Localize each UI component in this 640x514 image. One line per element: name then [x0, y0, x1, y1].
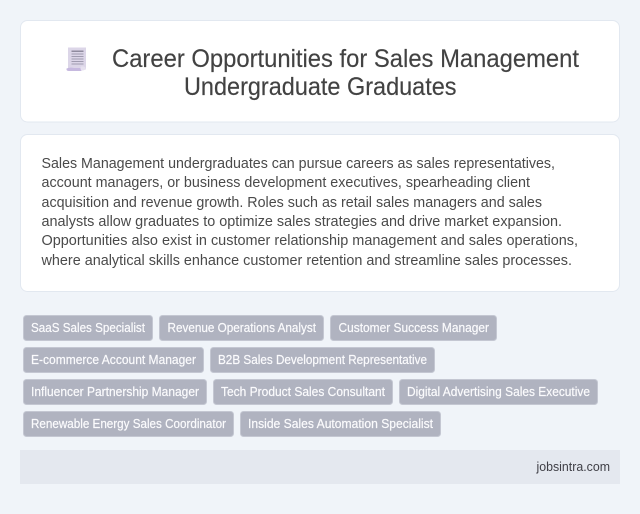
- tag: E-commerce Account Manager: E-commerce Account Manager: [31, 353, 196, 367]
- text block: description: [41, 156, 578, 269]
- tag: Revenue Operations Analyst: Revenue Operations Analyst: [168, 321, 316, 335]
- text block: description: where analytical skills enhance customer retention and streamline sales processes.: [41, 253, 572, 269]
- job tags: [24, 316, 598, 436]
- tag: Inside Sales Automation Specialist: Inside Sales Automation Specialist: [248, 417, 433, 431]
- panel: header: [20, 20, 620, 122]
- tag: Inside Sales Automation Specialist: [240, 412, 440, 436]
- tag: Renewable Energy Sales Coordinator: [24, 412, 234, 436]
- icon: paper scroll: [66, 48, 86, 71]
- tag: Digital Advertising Sales Executive: Digital Advertising Sales Executive: [407, 385, 590, 399]
- footer: [20, 450, 620, 484]
- tag: E-commerce Account Manager: [24, 348, 204, 372]
- tag: Revenue Operations Analyst: [160, 316, 324, 340]
- text block: description: Opportunities also exist in customer relationship management and sales operations,: [42, 233, 578, 249]
- tag: Digital Advertising Sales Executive: [400, 380, 598, 404]
- tag: B2B Sales Development Representative: B2B Sales Development Representative: [218, 353, 427, 367]
- text block: description: Sales Management undergraduates can pursue careers as sales representatives,: [42, 156, 555, 172]
- tag: SaaS Sales Specialist: SaaS Sales Specialist: [31, 321, 145, 335]
- tag: Renewable Energy Sales Coordinator: Renewable Energy Sales Coordinator: [31, 417, 226, 431]
- tag: Customer Success Manager: Customer Success Manager: [338, 321, 489, 335]
- tag: Influencer Partnership Manager: [24, 380, 206, 404]
- tag: Influencer Partnership Manager: Influencer Partnership Manager: [31, 385, 199, 399]
- title: Career Opportunities for Sales Management: [112, 45, 579, 73]
- footer source text: jobsintra.com: [536, 460, 610, 474]
- tag: Customer Success Manager: [330, 316, 496, 340]
- text block: description: acquisition and revenue growth. Roles such as retail sales managers and sales: [42, 195, 542, 211]
- tag: Tech Product Sales Consultant: [214, 380, 392, 404]
- text block: description: account managers, or business development executives, spearheading client: [42, 175, 530, 191]
- tag: SaaS Sales Specialist: [24, 316, 152, 340]
- text block: description: analysts allow graduates to optimize sales strategies and drive market expansion.: [42, 214, 562, 230]
- tag: Tech Product Sales Consultant: Tech Product Sales Consultant: [221, 385, 385, 399]
- title: Undergraduate Graduates: [184, 73, 456, 101]
- panel: description: [20, 134, 620, 292]
- title: [112, 45, 579, 101]
- tag: B2B Sales Development Representative: [210, 348, 434, 372]
